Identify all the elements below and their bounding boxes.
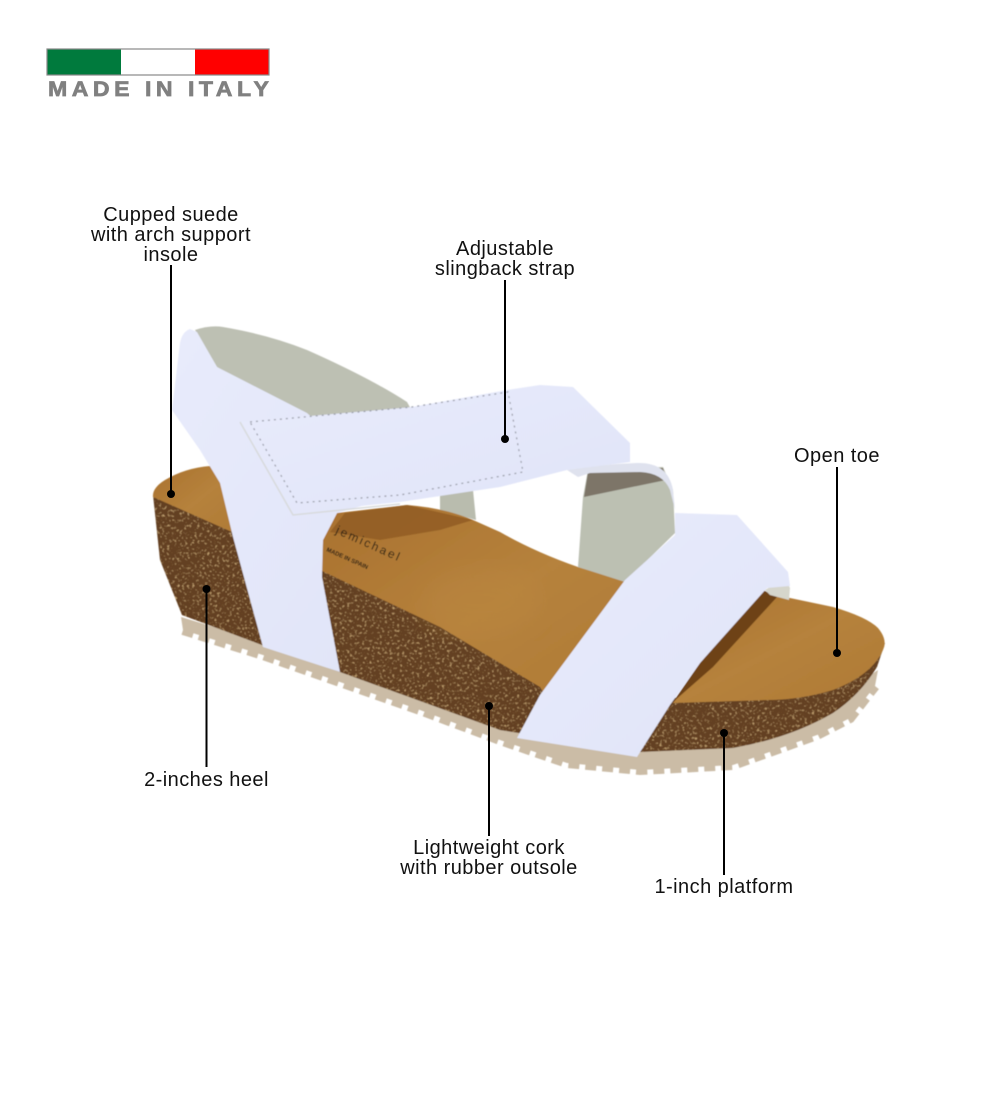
shadow on midfoot [330,505,473,540]
flag [47,49,269,75]
front lining edge [765,578,790,600]
callout: lightweight cork: Lightweight cork [413,837,565,859]
insole: forefoot [673,593,885,703]
callout: 1-inch platform [654,729,794,898]
callout: cupped suede insole [90,204,251,498]
adjustable slingback strap [240,385,630,515]
callout: 2-inches heel [144,585,269,791]
front strap [517,513,790,757]
callout: 2-inches heel: 2-inches heel [144,769,269,791]
shadow under front strap [673,590,777,702]
callout: cupped suede insole: with arch support [90,224,251,246]
sandal illustration [153,326,885,770]
brand print on insole: MADE IN SPAIN [325,547,369,571]
insole: midfoot [320,505,640,720]
logo: made in Italy [47,49,273,101]
insole: heel area [153,466,240,536]
callout: cupped suede insole: Cupped suede [103,204,239,226]
callout: open toe [794,445,880,657]
callout: adjustable slingback strap [435,238,575,443]
cork wedge [153,495,885,752]
rubber outsole [181,617,878,770]
callout: cupped suede insole: insole [144,244,198,266]
grey lining behind strap [440,490,476,520]
callout: adjustable slingback strap: Adjustable [456,238,554,260]
light patch on midfoot [420,566,540,634]
heel strap [172,329,400,672]
brand print on insole: jemichael [333,523,404,564]
right strap lining [567,463,675,582]
callout: lightweight cork [399,702,578,879]
callout: adjustable slingback strap: slingback strap [435,258,575,280]
callout: open toe: Open toe [794,445,880,467]
callout: lightweight cork: with rubber outsole [399,857,578,879]
heel inner lining [195,326,420,430]
callout: 1-inch platform: 1-inch platform [654,876,794,898]
logo text: MADE IN ITALY [48,77,273,101]
